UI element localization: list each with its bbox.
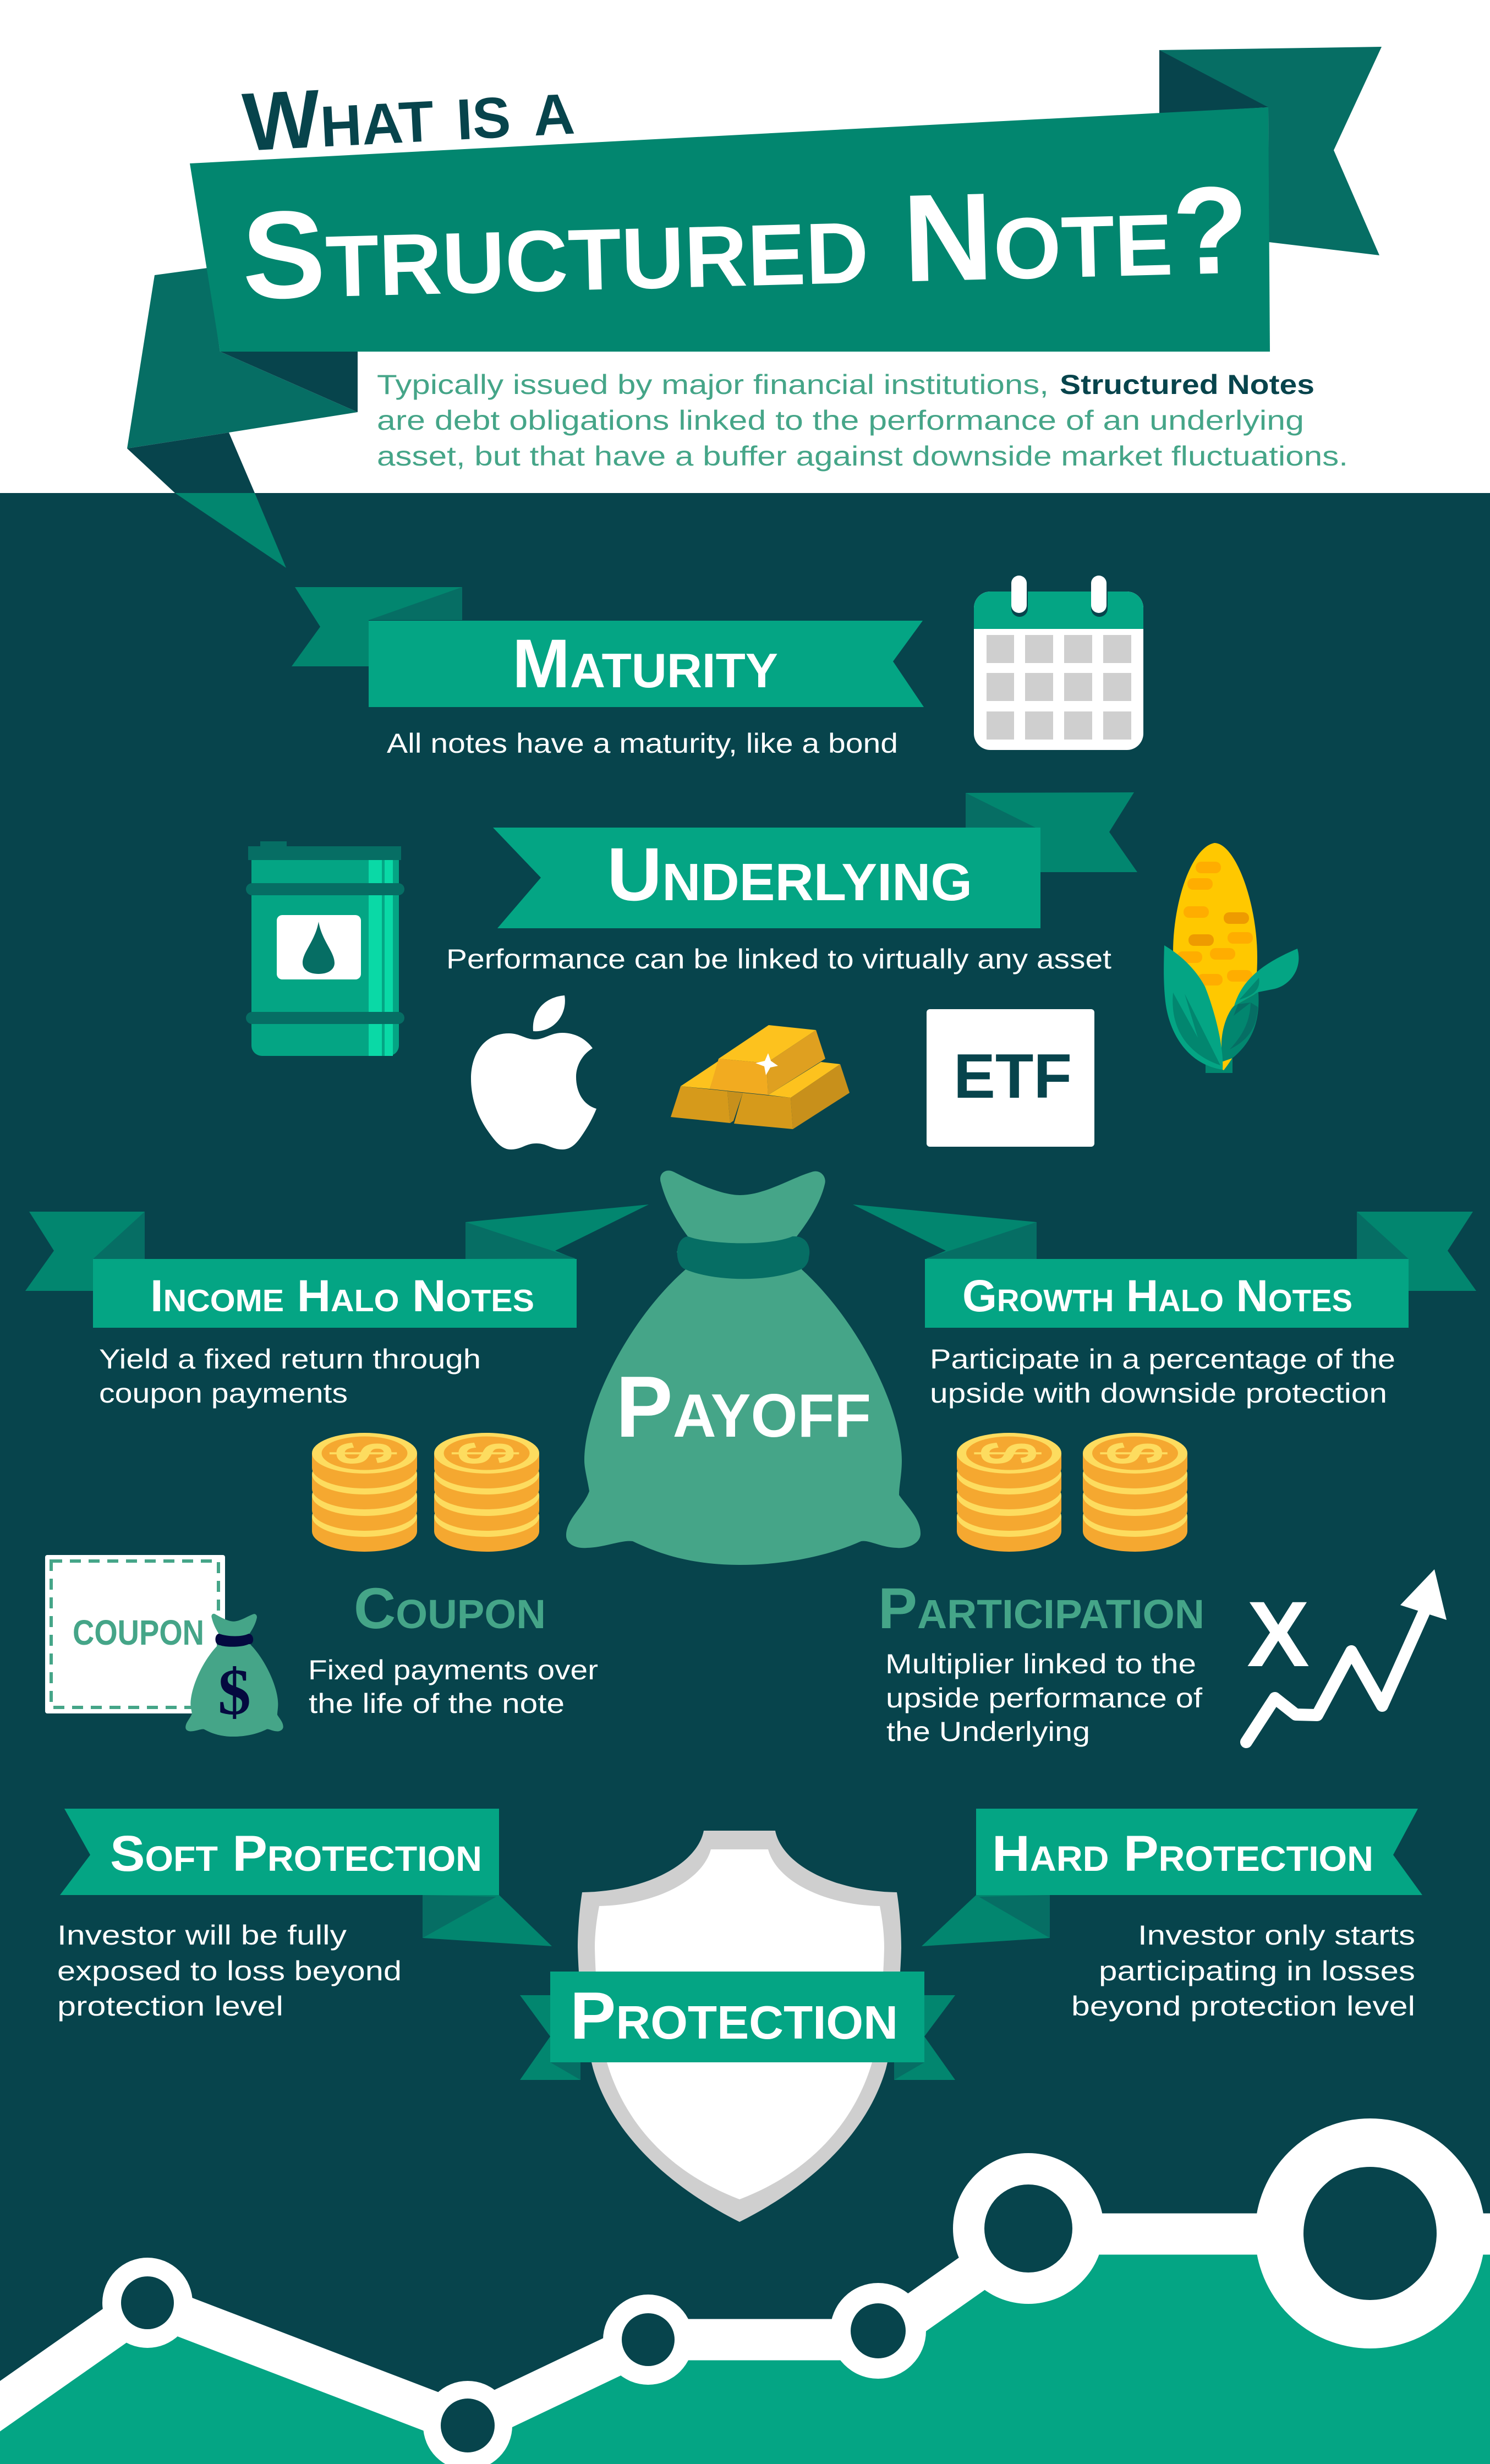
title line one: What is a [240, 59, 577, 168]
heading: participation: Participation [878, 1576, 1204, 1641]
ribbon: maturity [292, 587, 924, 707]
text: participation description: the Underlying [886, 1716, 1090, 1747]
heading: soft protection: Soft Protection [110, 1826, 482, 1882]
icon: coin stacks right: $ [1089, 1442, 1181, 1464]
text: income description: coupon payments [99, 1378, 348, 1409]
icon: money bag [566, 1170, 921, 1565]
icon: bag tie [677, 1236, 809, 1279]
heading: income halo notes: Income Halo Notes [150, 1271, 534, 1321]
text: growth description: Participate in a percentage of the [930, 1344, 1395, 1375]
icon: coin stacks right [957, 1433, 1187, 1552]
intro paragraph: are debt obligations linked to the performance of an underlying [377, 405, 1304, 436]
text: hard protection description [1071, 1920, 1415, 2022]
heading: payoff: Payoff [616, 1359, 871, 1455]
ribbon: income halo notes [25, 1204, 649, 1328]
text: soft protection description: Investor will be fully [57, 1920, 347, 1951]
text: income description: Yield a fixed return through [99, 1344, 481, 1375]
heading: hard protection: Hard Protection [992, 1826, 1373, 1882]
heading: coupon: Coupon [354, 1576, 546, 1641]
title line two: Structured Note? [240, 160, 1251, 325]
intro paragraph: asset, but that have a buffer against downside market fluctuations. [377, 441, 1348, 472]
ribbon: underlying [493, 792, 1137, 928]
panel: soft protection [57, 1809, 552, 2022]
text: participation description: upside performance of [886, 1683, 1202, 1713]
icon: apple logo [471, 995, 596, 1149]
icon: calendar [974, 576, 1143, 750]
intro paragraph: Typically issued by major financial institutions, [377, 369, 1049, 400]
text: participation description: Multiplier linked to the [885, 1649, 1196, 1679]
ribbon: hard protection [922, 1809, 1422, 1946]
text: underlying description: Performance can be linked to virtually any asset [446, 944, 1111, 974]
text: hard protection description: beyond protection level [1071, 1991, 1415, 2022]
icon: shield [578, 1831, 901, 2222]
icon: coin stacks left: $ [440, 1442, 533, 1464]
chart: rising line with nodes [0, 2118, 1490, 2464]
icon: oil barrel [246, 841, 404, 1056]
panel: hard protection [922, 1809, 1422, 2022]
header ribbon with title [127, 47, 1382, 568]
heading: maturity: Maturity [512, 626, 778, 702]
ribbon: soft protection [60, 1809, 552, 1946]
intro paragraph [377, 369, 1348, 472]
text: hard protection description: Investor only starts [1138, 1920, 1415, 1951]
icon: etf card: ETF [954, 1042, 1072, 1111]
panel: underlying [246, 792, 1299, 1149]
text: income description [99, 1344, 481, 1409]
icon: coin stacks right: $ [963, 1442, 1055, 1464]
panel: payoff bag [566, 1170, 921, 1565]
icon: corn [1164, 843, 1299, 1073]
panel: participation [878, 1569, 1447, 1747]
heading: protection: Protection [570, 1978, 898, 2053]
text: coupon description [308, 1655, 598, 1719]
heading: underlying: Underlying [607, 833, 972, 917]
text: participation description [885, 1649, 1202, 1747]
icon: coupon ticket [45, 1555, 225, 1713]
icon: rising arrow [1246, 1569, 1447, 1742]
icon: coin stacks left [312, 1433, 539, 1552]
text: soft protection description: exposed to loss beyond [57, 1956, 402, 1986]
ribbon: protection [520, 1972, 955, 2080]
text: coupon description: Fixed payments over [308, 1655, 598, 1685]
panel: protection shield [520, 1831, 955, 2222]
icon: etf card [927, 1009, 1094, 1147]
text: growth description: upside with downside protection [930, 1378, 1387, 1409]
icon: coin stacks left: $ [318, 1442, 410, 1464]
text: hard protection description: participating in losses [1099, 1956, 1415, 1986]
panel: coupon [45, 1555, 598, 1737]
text: growth description [930, 1344, 1395, 1409]
text: coupon description: the life of the note [309, 1688, 565, 1719]
icon: small money bag [185, 1614, 283, 1737]
text: soft protection description [57, 1920, 402, 2022]
icon: coupon ticket: COUPON [73, 1613, 204, 1652]
panel: growth halo notes [853, 1204, 1476, 1409]
panel: income halo notes [25, 1204, 649, 1409]
panel: maturity [292, 576, 1143, 759]
ribbon: growth halo notes [853, 1204, 1476, 1328]
icon: small money bag: $ [218, 1655, 251, 1728]
intro paragraph: Structured Notes [1060, 369, 1314, 400]
text: maturity description: All notes have a maturity, like a bond [387, 728, 898, 759]
heading: growth halo notes: Growth Halo Notes [962, 1271, 1352, 1321]
text: soft protection description: protection level [57, 1991, 283, 2022]
icon: gold bars [671, 1025, 850, 1129]
icon: multiplier x: X [1247, 1582, 1310, 1686]
